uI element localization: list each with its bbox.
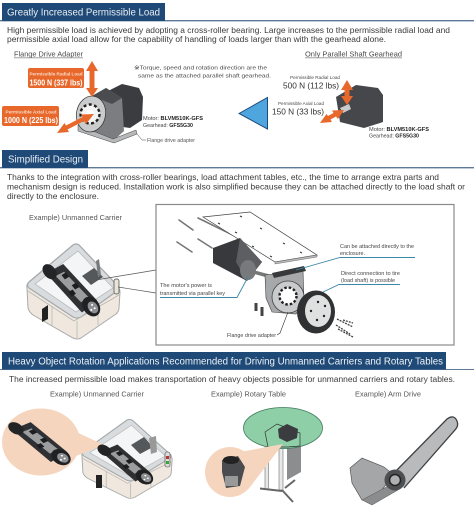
- illustration: mounting screws: [177, 218, 243, 252]
- label: parallel shaft radial load: [283, 75, 340, 90]
- heading: heavy object rotation applications: [0, 352, 474, 370]
- callout: permissible axial load: [2, 106, 59, 126]
- text: intro paragraph: High permissible load is achieved by adopting a cross-roller bearing. Large increases to the permissible radial load and: [7, 25, 450, 35]
- callout: permissible radial load: Permissible Radial Load: [30, 72, 83, 78]
- magnified callout: [205, 444, 283, 497]
- text: simplified design paragraph: directly to the enclosure.: [7, 191, 99, 201]
- label: flange drive adapter: Flange drive adapter: [147, 138, 195, 144]
- callout: motor power via parallel key: The motor's power is: [160, 283, 212, 289]
- illustration: small bolts: [256, 303, 353, 337]
- output flange: [384, 470, 406, 490]
- table support frame: [260, 428, 301, 502]
- label: flange drive adapter: [137, 134, 195, 144]
- magnified gearmotor callout: [2, 408, 104, 476]
- section: simplified design: [0, 150, 474, 345]
- illustration: rotary table application: [205, 408, 322, 502]
- illustration: arm drive application: [350, 417, 458, 505]
- label: motor and gearhead model, flange version: [143, 116, 204, 129]
- label: parallel shaft radial load: Permissible Radial Load: [290, 75, 340, 81]
- callout: attached directly to enclosure: enclosure.: [340, 251, 365, 257]
- heading: only parallel shaft gearhead: Only Parallel Shaft Gearhead: [305, 52, 402, 58]
- callout: permissible axial load: Permissible Axial Load: [6, 110, 57, 116]
- illustration: gear body and flange: [265, 266, 306, 314]
- heading: simplified design: [0, 150, 474, 168]
- label: parallel shaft radial load: 500 N (112 lbs): [283, 82, 339, 90]
- label: example unmanned carrier: Example) Unmanned Carrier: [29, 213, 123, 222]
- callout: permissible axial load: 1000 N (225 lbs): [4, 116, 58, 125]
- label: motor and gearhead model, parallel version: [369, 127, 430, 140]
- text: intro paragraph: permissible axial load allow for the capability of handling of loads larger than with the gearhead alone.: [7, 34, 386, 44]
- arrow: axial load, parallel shaft: [320, 110, 344, 123]
- label: parallel shaft axial load: Permissible Axial Load: [278, 101, 324, 107]
- carrier body: [82, 419, 172, 498]
- label: example rotary table: Example) Rotary Table: [211, 390, 286, 398]
- heading: greatly increased permissible load: [0, 3, 474, 21]
- label: motor and gearhead model, parallel version: Gearhead: GFS5G30: [369, 134, 419, 140]
- note: torque, speed and rotation direction: [134, 64, 271, 80]
- callout: direct connection to tire: Direct connection to tire: [341, 271, 400, 277]
- section: greatly increased permissible load: [0, 3, 474, 144]
- arrow: radial load: [86, 61, 98, 97]
- label: motor and gearhead model, parallel version: Motor: BLVM510K-GFS: [369, 127, 430, 133]
- arrow: axial load: [57, 114, 94, 133]
- illustration: parallel shaft gearhead motor: [336, 85, 383, 128]
- gearmotor on table: [265, 424, 300, 447]
- arm: [395, 417, 458, 488]
- callout: motor power via parallel key: [160, 277, 248, 298]
- text: simplified design paragraph: mechanism design is reduced. Installation work is also simplified because they can be attached directly to the load shaft or: [7, 182, 465, 192]
- label: parallel shaft axial load: [272, 101, 324, 116]
- illustration: unmanned carrier application: [2, 408, 172, 498]
- arrow: radial load, parallel shaft: [341, 80, 353, 105]
- callout: motor power via parallel key: transmitted via parallel key: [160, 291, 225, 297]
- callout: permissible radial load: [28, 68, 84, 88]
- text: simplified design paragraph: [7, 172, 465, 201]
- note: torque, speed and rotation direction: ※Torque, speed and rotation direction are the: [134, 64, 267, 72]
- heading: heavy object rotation applications: Heavy Object Rotation Applications Recommended for Driving Unmanned Carriers and Rotary Tables: [8, 356, 443, 368]
- illustration: tire: [297, 290, 335, 334]
- callout: permissible radial load: 1500 N (337 lbs): [30, 78, 83, 88]
- panel: exploded view: [156, 204, 454, 345]
- motor: [350, 458, 394, 500]
- carrier details: [96, 436, 170, 488]
- section: heavy object rotation applications: [0, 352, 474, 505]
- illustration: motor with flange drive adapter: [74, 84, 143, 143]
- heading: flange drive adapter: Flange Drive Adapter: [14, 52, 84, 58]
- callout: attached directly to enclosure: Can be attached directly to the: [340, 244, 414, 250]
- callout: flange drive adapter: [227, 312, 288, 339]
- note: torque, speed and rotation direction: same as the attached parallel shaft gearhead.: [138, 74, 271, 80]
- icon: comparison triangle: [239, 98, 268, 129]
- text: simplified design paragraph: Thanks to the integration with cross-roller bearings, load attachment tables, etc., the time to arrange extra parts and: [7, 172, 439, 182]
- heading: simplified design: Simplified Design: [8, 154, 83, 166]
- carrier drive assembly: [95, 442, 157, 487]
- label: example arm drive: Example) Arm Drive: [355, 390, 421, 398]
- label: parallel shaft axial load: 150 N (33 lbs): [272, 108, 324, 116]
- rotary table top: [244, 408, 322, 448]
- connector lines to detail panel: [96, 270, 156, 293]
- text: intro paragraph: [7, 25, 450, 44]
- callout: direct connection to tire: [323, 271, 400, 292]
- illustration: unmanned carrier: [27, 244, 120, 339]
- label: motor and gearhead model, flange version: Gearhead: GFS5G30: [143, 123, 193, 129]
- illustration: motor: [213, 238, 272, 281]
- text: application summary: The increased permissible load makes transportation of heavy objects possible for unmanned carriers and rotary tables.: [9, 374, 455, 384]
- label: example unmanned carrier: Example) Unmanned Carrier: [50, 390, 145, 398]
- label: motor and gearhead model, flange version: Motor: BLVM510K-GFS: [143, 116, 204, 122]
- heading: greatly increased permissible load: Greatly Increased Permissible Load: [7, 8, 160, 18]
- callout: attached directly to enclosure: [296, 244, 415, 270]
- callout: flange drive adapter: Flange drive adapter: [227, 333, 276, 339]
- illustration: enclosure plate: [203, 212, 317, 264]
- callout: direct connection to tire: (load shaft) is possible: [341, 278, 395, 284]
